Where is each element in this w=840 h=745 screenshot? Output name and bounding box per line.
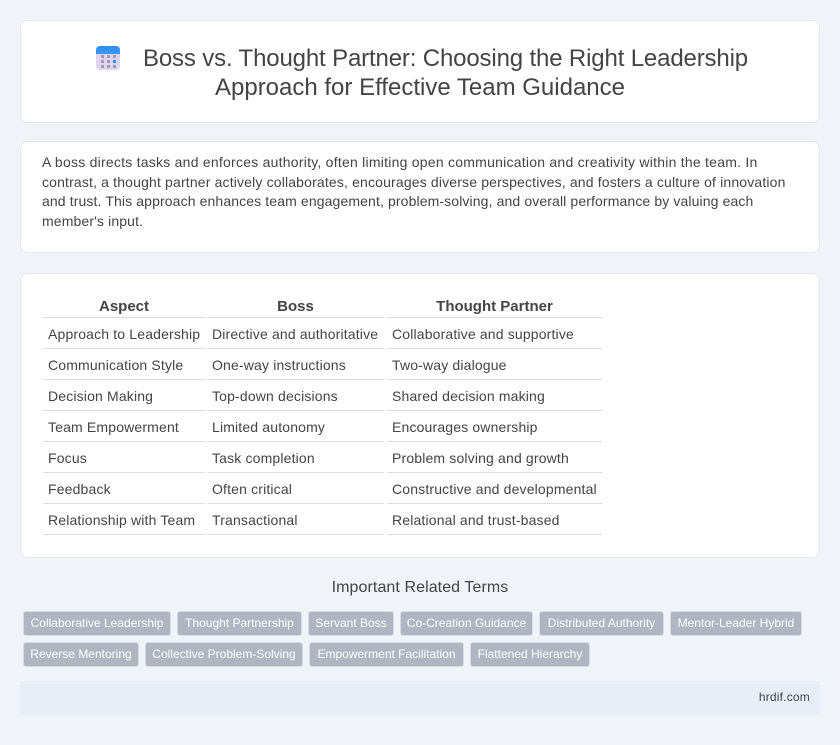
footer bar: [20, 681, 820, 715]
comparison table: Thought Partner: [436, 298, 553, 315]
comparison table: Relationship with Team: [48, 512, 195, 528]
related term tags: Mentor-Leader Hybrid: [678, 616, 794, 630]
footer source: hrdif.com: [759, 690, 810, 704]
intro text: A boss directs tasks and enforces authority, often limiting open communication and creativity within the team. In: [42, 154, 758, 170]
related term tags: Co-Creation Guidance: [407, 616, 526, 630]
related term tags: Servant Boss: [315, 616, 387, 630]
comparison table: Decision Making: [48, 388, 153, 404]
related term tags: Empowerment Facilitation: [317, 647, 456, 661]
comparison table: [43, 298, 602, 535]
related term tags: Distributed Authority: [548, 616, 655, 630]
comparison table: Problem solving and growth: [392, 450, 569, 466]
related term tags: Collective Problem-Solving: [152, 647, 296, 661]
comparison table: Top-down decisions: [212, 388, 338, 404]
intro text: [42, 154, 786, 229]
related term tags: Thought Partnership: [185, 616, 294, 630]
related term tags: [23, 611, 802, 667]
comparison table: Limited autonomy: [212, 419, 325, 435]
comparison table: Task completion: [212, 450, 315, 466]
related terms heading: Important Related Terms: [332, 579, 508, 596]
comparison table: Often critical: [212, 481, 292, 497]
icon: calendar: [96, 46, 120, 70]
comparison table: Approach to Leadership: [48, 326, 200, 342]
intro panel: [20, 141, 820, 253]
title: [143, 45, 748, 101]
related term tags: Flattened Hierarchy: [478, 647, 582, 661]
intro text: member's input.: [42, 213, 143, 229]
comparison table: Team Empowerment: [48, 419, 179, 435]
comparison table: Boss: [277, 298, 314, 315]
comparison table: Encourages ownership: [392, 419, 538, 435]
title: Boss vs. Thought Partner: Choosing the Right Leadership: [143, 45, 748, 72]
intro text: and trust. This approach enhances team engagement, problem-solving, and overall performance by valuing each: [42, 193, 753, 209]
comparison table: One-way instructions: [212, 357, 346, 373]
intro text: contrast, a thought partner actively collaborates, encourages diverse perspectives, and fosters a culture of innovation: [42, 174, 786, 190]
panel: comparison table: [20, 273, 820, 558]
comparison table: Relational and trust-based: [392, 512, 560, 528]
title: Approach for Effective Team Guidance: [215, 74, 625, 101]
comparison table: Aspect: [99, 298, 149, 315]
comparison table: Directive and authoritative: [212, 326, 378, 342]
comparison table: Shared decision making: [392, 388, 545, 404]
header panel: [20, 20, 820, 123]
comparison table: Transactional: [212, 512, 298, 528]
comparison table: Feedback: [48, 481, 111, 497]
comparison table: Focus: [48, 450, 87, 466]
comparison table: Collaborative and supportive: [392, 326, 574, 342]
related term tags: Collaborative Leadership: [31, 616, 163, 630]
comparison table: Constructive and developmental: [392, 481, 597, 497]
comparison table: Communication Style: [48, 357, 183, 373]
comparison table: Two-way dialogue: [392, 357, 507, 373]
related term tags: Reverse Mentoring: [30, 647, 132, 661]
